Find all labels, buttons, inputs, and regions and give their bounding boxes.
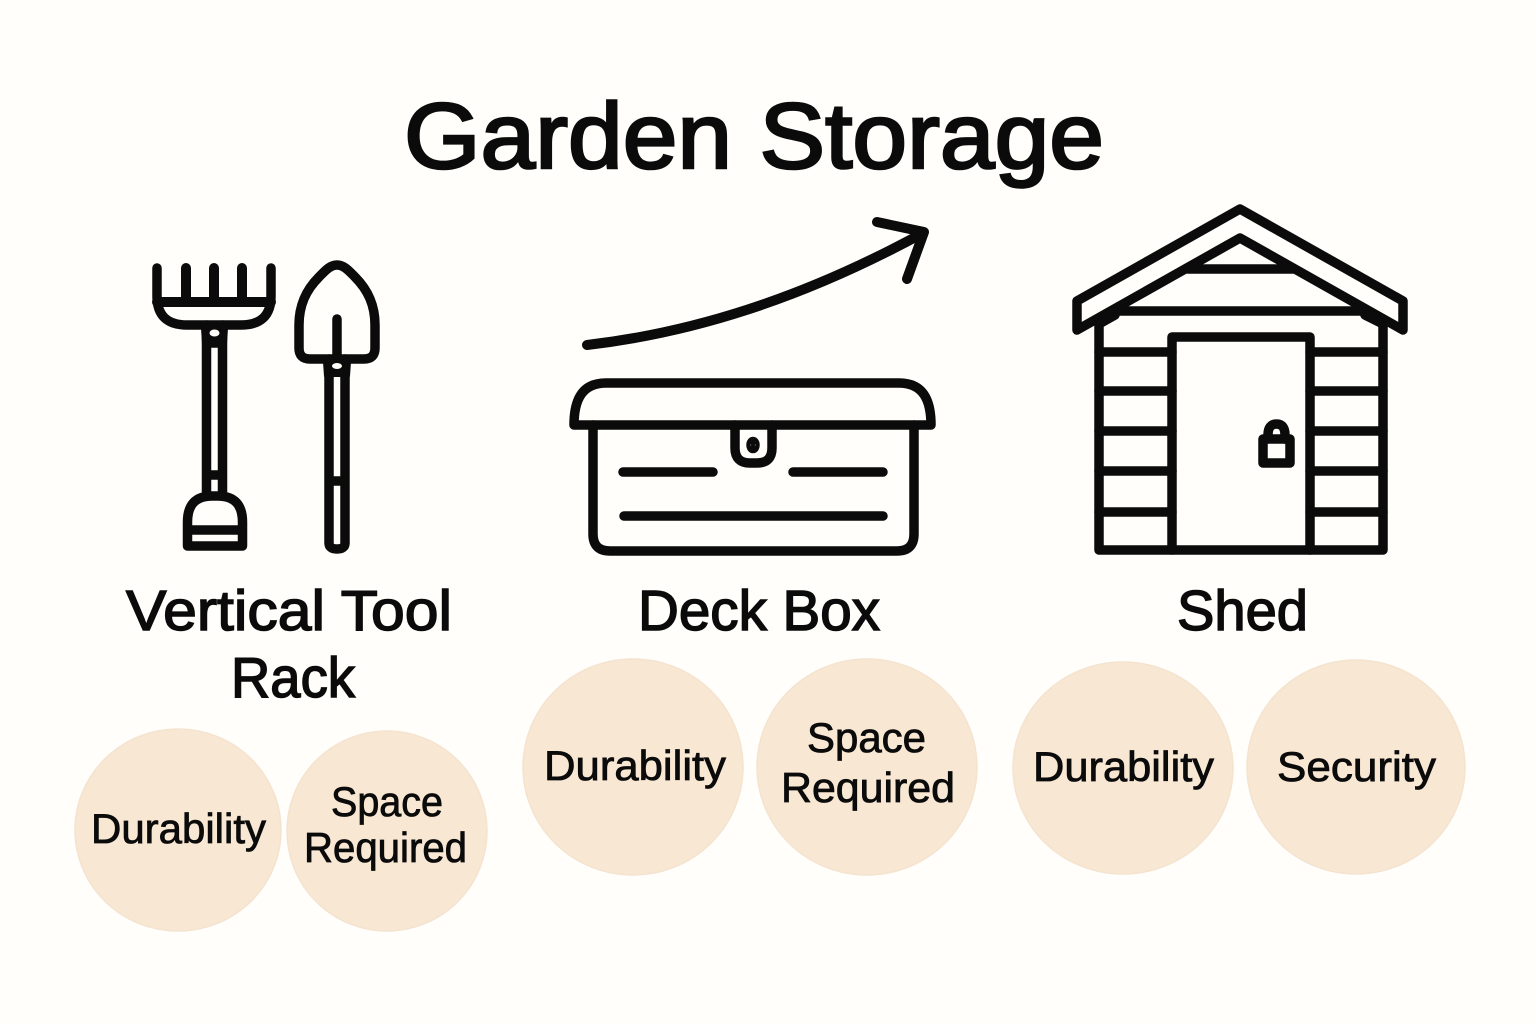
badge: rack durability: Durability — [91, 805, 266, 852]
badge: rack space required: Space — [331, 778, 443, 825]
icon: shed — [1077, 209, 1403, 550]
icon: shovel — [299, 265, 375, 549]
badge: shed security — [1247, 660, 1465, 874]
heading: vertical tool rack — [126, 579, 452, 710]
heading: vertical tool rack: Vertical Tool — [126, 579, 452, 643]
badge: deck box durability: Durability — [544, 742, 726, 789]
badge: deck box space required — [757, 659, 977, 875]
heading: vertical tool rack: Rack — [231, 646, 355, 710]
badge: deck box space required: Space — [807, 714, 926, 761]
badge: shed durability — [1013, 662, 1233, 874]
icon: deck box — [574, 383, 931, 551]
title: Garden Storage — [404, 84, 1104, 188]
badge: rack durability — [75, 729, 281, 931]
icon: rake and shovel — [157, 265, 375, 549]
badge: shed durability: Durability — [1033, 743, 1214, 790]
badge: rack space required: Required — [304, 824, 467, 871]
arrow — [587, 222, 924, 345]
badge: shed security: Security — [1277, 743, 1436, 790]
badge: rack space required — [287, 731, 487, 931]
icon: padlock — [1263, 424, 1290, 463]
icon: rake — [157, 268, 271, 546]
heading: shed: Shed — [1177, 579, 1308, 643]
badge: deck box space required: Required — [781, 764, 955, 811]
heading: deck box: Deck Box — [638, 579, 880, 643]
badge: deck box durability — [523, 659, 743, 875]
